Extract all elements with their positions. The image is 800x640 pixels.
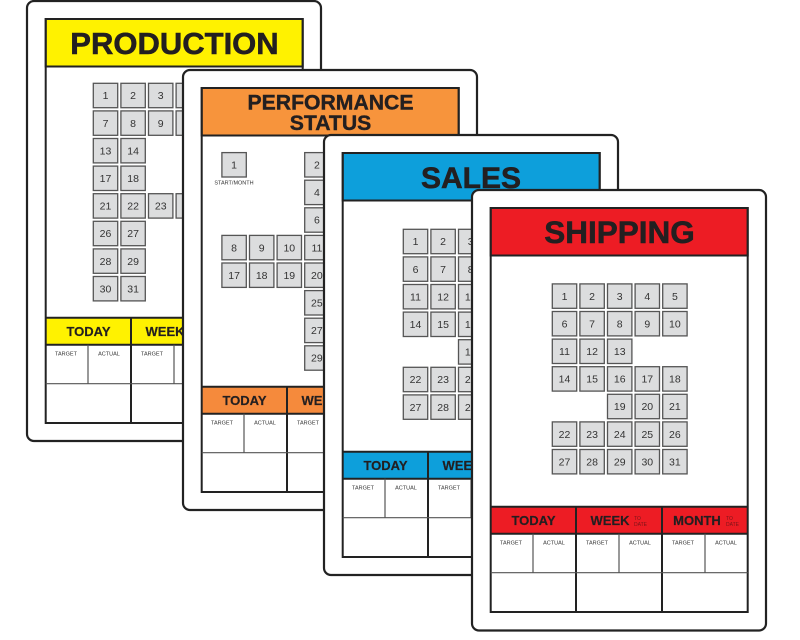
footer: shipping targets: ACTUAL <box>629 540 651 546</box>
day grid: sales: 7 <box>440 264 446 276</box>
day grid: production: 7 <box>103 118 109 130</box>
day grid: production: 24 <box>182 201 194 213</box>
day grid: shipping: 7 <box>589 318 595 330</box>
day grid: shipping: 25 <box>641 429 653 441</box>
footer: performance status targets <box>202 88 459 492</box>
day grid: sales: 24 <box>465 374 477 386</box>
day grid: shipping: 14 <box>559 374 570 386</box>
day grid: sales: 13 <box>465 291 477 303</box>
day grid: production: 31 <box>127 283 139 295</box>
day grid: sales: 19 <box>465 347 477 359</box>
day grid: shipping: 4 <box>644 291 650 303</box>
day grid: shipping: 22 <box>559 429 570 441</box>
day grid: shipping: 28 <box>586 456 598 468</box>
footer: sales targets: TODAY <box>363 458 408 473</box>
day grid: shipping: 20 <box>641 401 653 413</box>
day grid: shipping: 16 <box>614 374 626 386</box>
day grid: shipping: 23 <box>586 429 598 441</box>
footer: shipping targets <box>491 208 748 612</box>
day grid: performance status: 8 <box>231 242 237 254</box>
footer: shipping targets: TODAY <box>511 513 556 528</box>
day grid: sales: 14 <box>410 319 421 331</box>
footer: shipping targets: WEEK <box>590 513 630 528</box>
day grid: production: 14 <box>127 145 139 157</box>
day grid: sales: 23 <box>437 374 449 386</box>
day grid: shipping <box>552 284 687 474</box>
footer: sales targets: TARGET <box>438 486 461 492</box>
day grid: performance status: 17 <box>228 270 240 282</box>
panel: sales board <box>324 135 618 575</box>
day grid: performance status: 29 <box>311 353 323 365</box>
day grid: performance status: 19 <box>283 270 295 282</box>
day grid: production: 2 <box>130 90 136 102</box>
footer: production targets: TARGET <box>55 352 78 358</box>
day grid: performance status: 27 <box>311 325 323 337</box>
footer: performance status targets: WEEK <box>302 393 341 408</box>
footer: production targets: TODAY <box>66 324 111 339</box>
day grid: shipping: 13 <box>614 346 626 358</box>
day grid: sales: 1 <box>413 236 419 248</box>
footer: performance status targets: ACTUAL <box>254 420 276 426</box>
panel: shipping board <box>472 190 766 630</box>
day grid: production: 4 <box>185 90 191 102</box>
day grid: performance status: 9 <box>259 242 265 254</box>
day grid: production: 29 <box>127 256 139 268</box>
day grid: production: 8 <box>130 118 136 130</box>
day grid: sales: 15 <box>437 319 449 331</box>
footer: shipping targets: DATE <box>726 522 740 528</box>
footer: shipping targets: ACTUAL <box>543 540 565 546</box>
day grid: sales: 6 <box>413 264 419 276</box>
day grid: sales: 28 <box>437 402 449 414</box>
day grid: shipping: 29 <box>614 456 626 468</box>
footer: sales targets: WEEK <box>442 458 482 473</box>
day grid: shipping: 15 <box>586 374 598 386</box>
header: sales <box>343 153 600 200</box>
panel: production board <box>27 1 321 441</box>
header: sales: SALES <box>421 162 521 195</box>
day grid: performance status: 4 <box>314 187 320 199</box>
day grid: shipping: 31 <box>669 456 681 468</box>
day grid: shipping: 10 <box>669 318 681 330</box>
day grid: production: 1 <box>103 90 109 102</box>
day grid: performance status: 1 <box>231 160 237 172</box>
header: production <box>46 19 303 66</box>
day grid: performance status: 20 <box>311 270 323 282</box>
footer: shipping targets: TARGET <box>500 540 523 546</box>
day grid: performance status: 6 <box>314 215 320 227</box>
day grid: shipping: 19 <box>614 401 626 413</box>
day grid: shipping: 9 <box>644 318 650 330</box>
day grid: shipping: 30 <box>641 456 653 468</box>
day grid: performance status: 25 <box>311 298 323 310</box>
footer: shipping targets: ACTUAL <box>715 540 737 546</box>
day grid: sales: 2 <box>440 236 446 248</box>
day grid: shipping: 26 <box>669 429 681 441</box>
footer: sales targets <box>343 153 600 557</box>
label: start of month: START/MONTH <box>214 180 254 186</box>
day grid: sales <box>403 229 483 419</box>
day grid: performance status: 11 <box>311 242 323 254</box>
day grid: sales: 16 <box>465 319 477 331</box>
footer: sales targets: TARGET <box>352 486 375 492</box>
footer: production targets: TARGET <box>141 352 164 358</box>
day grid: sales: 11 <box>410 291 421 303</box>
footer: performance status targets: TODAY <box>222 393 267 408</box>
day grid: production <box>93 83 200 301</box>
day grid: production: 17 <box>100 173 111 185</box>
day grid: sales: 12 <box>437 291 449 303</box>
day grid: sales: 29 <box>465 402 477 414</box>
day grid: shipping: 6 <box>562 318 568 330</box>
day grid: shipping: 12 <box>586 346 598 358</box>
day grid: production: 30 <box>100 283 111 295</box>
footer: production targets: ACTUAL <box>98 352 120 358</box>
day grid: production: 27 <box>127 228 139 240</box>
day grid: shipping: 11 <box>559 346 570 358</box>
day grid: shipping: 2 <box>589 291 595 303</box>
day grid: shipping: 17 <box>641 374 653 386</box>
day grid: shipping: 27 <box>559 456 570 468</box>
day grid: production: 18 <box>127 173 139 185</box>
day grid: production: 10 <box>182 118 194 130</box>
footer: performance status targets: TARGET <box>297 420 320 426</box>
header: production: PRODUCTION <box>70 26 279 61</box>
day grid: performance status: 18 <box>256 270 268 282</box>
footer: shipping targets: DATE <box>634 522 648 528</box>
day grid: shipping: 1 <box>562 291 568 303</box>
footer: shipping targets: TO <box>726 516 733 522</box>
day grid: shipping: 3 <box>617 291 623 303</box>
day grid: sales: 8 <box>468 264 474 276</box>
day grid: sales: 27 <box>410 402 421 414</box>
footer: sales targets: ACTUAL <box>395 486 417 492</box>
footer: shipping targets: TARGET <box>586 540 609 546</box>
day grid: performance status: 10 <box>283 242 295 254</box>
day grid: shipping: 5 <box>672 291 678 303</box>
day grid: production: 28 <box>100 256 111 268</box>
day grid: shipping: 21 <box>669 401 681 413</box>
day grid: production: 21 <box>100 201 111 213</box>
footer: shipping targets: TARGET <box>672 540 695 546</box>
header: performance status <box>202 88 459 136</box>
day grid: shipping: 8 <box>617 318 623 330</box>
header: performance status: STATUS <box>290 112 371 135</box>
footer: shipping targets: TO <box>634 516 641 522</box>
day grid: shipping: 24 <box>614 429 626 441</box>
footer: performance status targets: TARGET <box>211 420 234 426</box>
day grid: performance status: 2 <box>314 160 320 172</box>
day grid: shipping: 18 <box>669 374 681 386</box>
footer: production targets: WEEK <box>146 324 185 339</box>
footer: shipping targets: MONTH <box>673 513 721 528</box>
header: performance status: PERFORMANCE <box>248 91 413 114</box>
day grid: production: 26 <box>100 228 111 240</box>
day grid: production: 23 <box>155 201 167 213</box>
day grid: sales: 22 <box>410 374 421 386</box>
day grid: production: 3 <box>158 90 164 102</box>
panel: performance status board <box>183 70 477 510</box>
header: shipping: SHIPPING <box>544 214 695 250</box>
day grid: performance status <box>222 153 329 370</box>
day grid: production: 9 <box>158 118 164 130</box>
day grid: production: 13 <box>100 145 111 157</box>
header: shipping <box>491 208 748 256</box>
day grid: production: 22 <box>127 201 139 213</box>
day grid: sales: 3 <box>468 236 474 248</box>
footer: production targets <box>46 19 303 423</box>
